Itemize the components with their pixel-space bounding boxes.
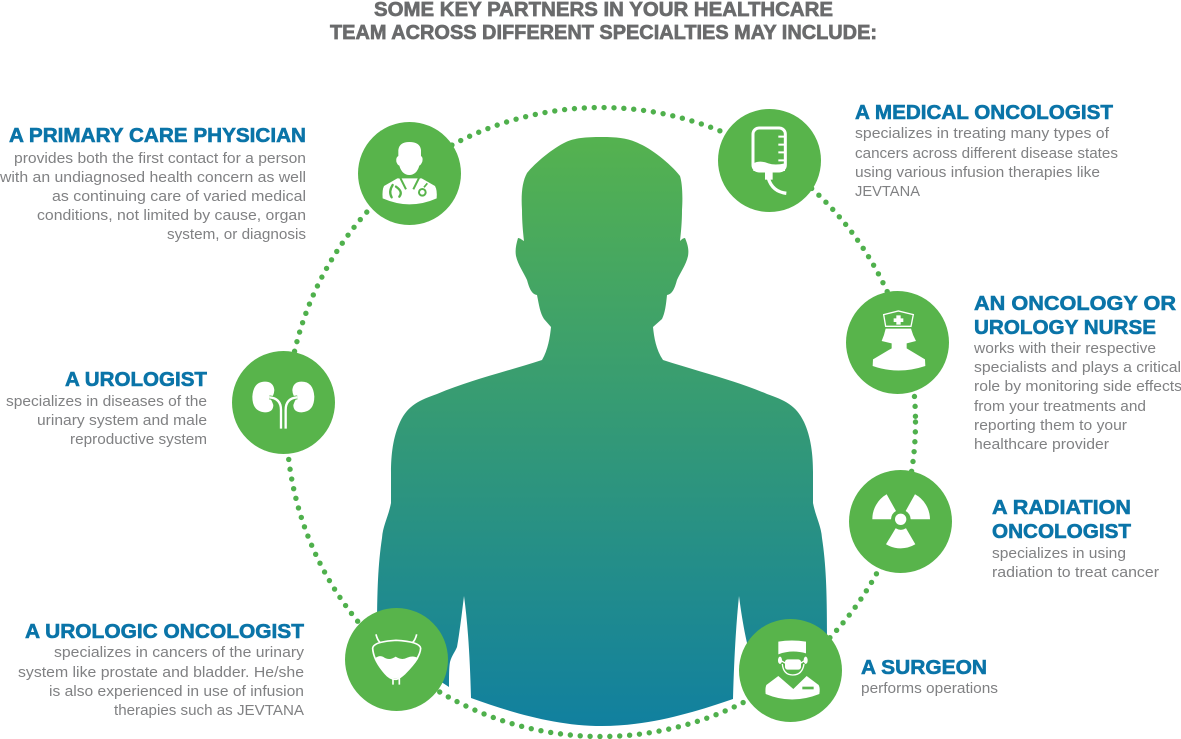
description: JEVTANA: [855, 184, 920, 200]
description: healthcare provider: [974, 437, 1109, 453]
panel: urologist: [6, 351, 335, 454]
description: provides both the first contact for a person: [14, 151, 306, 167]
description: conditions, not limited by cause, organ: [37, 208, 306, 224]
description: is also experienced in use of infusion: [49, 684, 304, 700]
heading: A RADIATION: [992, 496, 1131, 519]
panel: medical oncologist: [718, 101, 1118, 212]
description: system like prostate and bladder. He/she: [18, 665, 304, 681]
description: [973, 341, 1181, 453]
icon: radiation: [849, 470, 952, 573]
icon: kidneys: [232, 351, 335, 454]
description: system, or diagnosis: [167, 227, 306, 243]
description: using various infusion therapies like: [855, 165, 1100, 181]
icon: nurse: [846, 291, 949, 394]
description: cancers across different disease states: [855, 146, 1118, 162]
description: [18, 645, 305, 719]
description: reproductive system: [70, 432, 207, 448]
icon: doctor: [358, 122, 461, 225]
description: radiation to treat cancer: [992, 565, 1159, 581]
description: [6, 394, 207, 448]
heading: [992, 496, 1131, 543]
description: specializes in diseases of the: [6, 394, 207, 410]
panel: radiation oncologist: [849, 470, 1159, 581]
icon: bladder: [345, 608, 448, 711]
heading: A UROLOGIC ONCOLOGIST: [25, 620, 304, 643]
heading: A MEDICAL ONCOLOGIST: [855, 101, 1113, 124]
description: specializes in using: [992, 546, 1126, 562]
panel: primary care physician: [0, 122, 461, 243]
description: reporting them to your: [974, 418, 1127, 434]
description: [0, 151, 306, 243]
description: as continuing care of varied medical: [52, 189, 306, 205]
description: specializes in treating many types of: [855, 126, 1110, 142]
heading: AN ONCOLOGY OR: [974, 292, 1176, 315]
heading: ONCOLOGIST: [992, 520, 1131, 543]
panel: surgeon: [739, 619, 998, 722]
human silhouette: [377, 137, 827, 726]
heading: A PRIMARY CARE PHYSICIAN: [9, 124, 306, 147]
heading: [974, 292, 1176, 339]
icon: infusion bag: [718, 109, 821, 212]
description: therapies such as JEVTANA: [114, 703, 304, 719]
title: [330, 0, 877, 44]
description: works with their respective: [973, 341, 1156, 357]
description: [855, 126, 1118, 200]
description: performs operations: [861, 681, 998, 697]
heading: UROLOGY NURSE: [974, 316, 1156, 339]
description: role by monitoring side effects: [974, 379, 1181, 395]
panel: oncology or urology nurse: [846, 291, 1181, 453]
dotted ring: [286, 108, 916, 736]
description: urinary system and male: [37, 413, 207, 429]
icon: surgeon: [739, 619, 842, 722]
heading: A UROLOGIST: [65, 368, 207, 391]
panel: urologic oncologist: [18, 608, 448, 719]
title: TEAM ACROSS DIFFERENT SPECIALTIES MAY INCLUDE:: [330, 21, 877, 44]
description: specialists and plays a critical: [974, 360, 1181, 376]
description: [992, 546, 1159, 581]
description: with an undiagnosed health concern as well: [0, 170, 306, 186]
description: from your treatments and: [974, 399, 1146, 415]
heading: A SURGEON: [861, 656, 987, 679]
description: specializes in cancers of the urinary: [54, 645, 305, 661]
